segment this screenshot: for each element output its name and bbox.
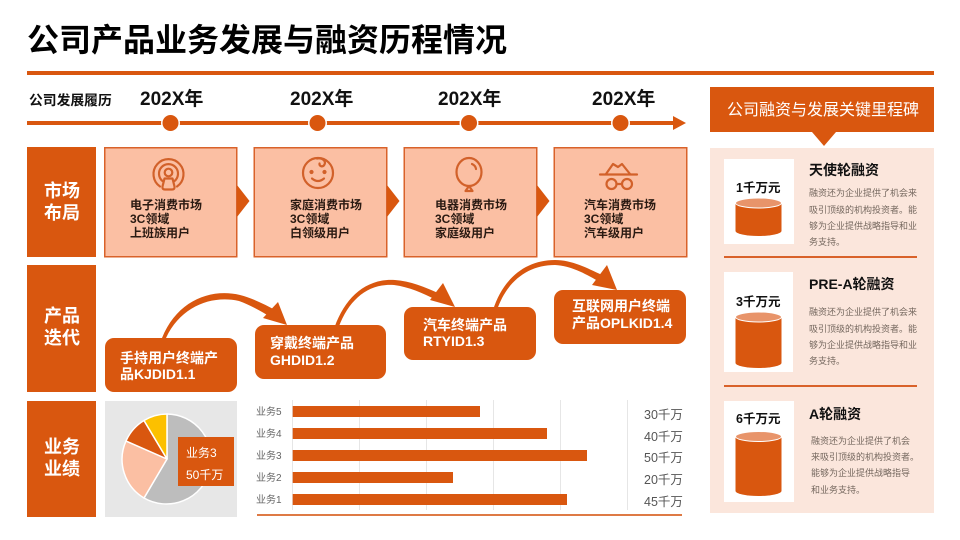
icon: cylinder medium bbox=[736, 312, 782, 368]
milestone: angel round bbox=[724, 159, 917, 258]
milestone: A round: 能够为企业提供战略指导 bbox=[811, 467, 910, 478]
bar chart: 业务1 bbox=[256, 493, 282, 506]
card: electronics market bbox=[105, 148, 237, 257]
row heading: performance: 业务 bbox=[44, 437, 80, 457]
row heading: market: 布局 bbox=[44, 203, 80, 223]
milestone: pre-A round: 3千万元 bbox=[736, 295, 781, 309]
timeline bbox=[27, 87, 686, 132]
arrow: product 2 to 3 bbox=[333, 280, 455, 332]
product box 1: 手持用户终端产 bbox=[120, 350, 218, 366]
milestone: angel round: 天使轮融资 bbox=[809, 162, 879, 178]
row heading: product: 产品 bbox=[44, 306, 80, 326]
timeline node 1: 202X年 bbox=[140, 87, 203, 110]
icon: podcast person bbox=[154, 159, 184, 190]
milestone: pre-A round bbox=[724, 272, 917, 387]
row heading: product: 迭代 bbox=[44, 328, 80, 348]
product box 1 bbox=[105, 338, 237, 392]
timeline node 4: 202X年 bbox=[592, 87, 655, 110]
arrow: card 3 to 4 bbox=[537, 185, 550, 217]
bar chart: 业务5 bbox=[256, 405, 282, 418]
bar chart: 20千万 bbox=[644, 473, 683, 487]
milestone: pre-A round: 够为企业提供战略指导和业 bbox=[809, 339, 917, 350]
milestone: angel round: 融资还为企业提供了机会来 bbox=[809, 187, 917, 198]
milestone: pre-A round: 吸引顶级的机构投资者。能 bbox=[809, 323, 917, 334]
timeline node 1 bbox=[140, 87, 203, 132]
milestone header bbox=[710, 87, 934, 146]
milestone background bbox=[710, 148, 934, 513]
arrow: product 1 to 2 bbox=[162, 293, 287, 338]
milestone: pre-A round: 融资还为企业提供了机会来 bbox=[809, 306, 917, 317]
card: appliance market: 电器消费市场 bbox=[435, 197, 507, 212]
product box 2: GHDID1.2 bbox=[270, 352, 335, 368]
timeline node 2 bbox=[290, 87, 353, 132]
card: home market: 3C领域 bbox=[290, 211, 329, 226]
card: auto market: 汽车消费市场 bbox=[584, 197, 656, 212]
row heading: product bbox=[27, 265, 96, 392]
bar chart bbox=[256, 400, 683, 516]
milestone: pre-A round: 务支持。 bbox=[809, 355, 845, 366]
card: electronics market: 上班族用户 bbox=[130, 225, 190, 240]
icon: cylinder large bbox=[736, 432, 782, 496]
card: home market: 白领级用户 bbox=[290, 225, 350, 240]
product box 4: 产品OPLKID1.4 bbox=[572, 315, 673, 331]
timeline node 3: 202X年 bbox=[438, 87, 501, 110]
milestone: A round: A轮融资 bbox=[809, 406, 861, 422]
milestone: A round bbox=[724, 401, 919, 502]
milestone: angel round: 1千万元 bbox=[736, 181, 781, 195]
row heading: market bbox=[27, 147, 96, 257]
row heading: performance bbox=[27, 401, 96, 517]
milestone: A round: 和业务支持。 bbox=[811, 484, 865, 495]
timeline axis arrow bbox=[27, 116, 686, 130]
arrow: card 1 to 2 bbox=[237, 185, 250, 217]
pie callout: 业务3 bbox=[186, 445, 217, 460]
milestone: A round: 来吸引顶级的机构投资者。 bbox=[811, 451, 919, 462]
bar chart: 业务3 bbox=[256, 449, 282, 462]
product box 3: 汽车终端产品 bbox=[423, 317, 507, 333]
timeline node 4 bbox=[592, 87, 655, 132]
bar chart: 业务4 bbox=[256, 427, 282, 440]
row heading: market: 市场 bbox=[44, 180, 80, 201]
milestone header: 公司融资与发展关键里程碑 bbox=[727, 101, 919, 119]
product box 3: RTYID1.3 bbox=[423, 333, 485, 349]
panel: product iteration bbox=[27, 260, 686, 392]
product box 4 bbox=[554, 290, 686, 344]
icon: cylinder small bbox=[736, 198, 782, 236]
timeline node 2: 202X年 bbox=[290, 87, 353, 110]
product box 2: 穿戴终端产品 bbox=[270, 335, 354, 351]
milestone: pre-A round: PRE-A轮融资 bbox=[809, 276, 895, 292]
milestone: A round: 融资还为企业提供了机会 bbox=[811, 435, 910, 446]
milestone: angel round: 吸引顶级的机构投资者。能 bbox=[809, 204, 917, 215]
card: electronics market: 3C领域 bbox=[130, 211, 169, 226]
bar chart: 40千万 bbox=[644, 430, 683, 444]
card: electronics market: 电子消费市场 bbox=[130, 197, 202, 212]
card: auto market: 汽车级用户 bbox=[584, 225, 644, 240]
arrow: card 2 to 3 bbox=[387, 185, 400, 217]
card: auto market: 3C领域 bbox=[584, 211, 623, 226]
bar chart: 30千万 bbox=[644, 408, 683, 422]
timeline node 3 bbox=[438, 87, 501, 132]
bar chart: 45千万 bbox=[644, 495, 683, 509]
pie callout: 50千万 bbox=[186, 468, 223, 482]
bar chart: 业务2 bbox=[256, 471, 282, 484]
card: appliance market: 家庭级用户 bbox=[435, 225, 495, 240]
panel: market layout bbox=[27, 147, 687, 257]
card: auto market bbox=[554, 148, 687, 257]
milestone: A round: 6千万元 bbox=[736, 412, 781, 426]
card: appliance market bbox=[404, 148, 537, 257]
pie callout bbox=[178, 437, 234, 486]
milestone: angel round: 够为企业提供战略指导和业 bbox=[809, 220, 917, 231]
row heading: performance: 业绩 bbox=[44, 458, 80, 479]
card: appliance market: 3C领域 bbox=[435, 211, 474, 226]
pie chart bbox=[105, 401, 237, 517]
product box 4: 互联网用户终端 bbox=[572, 298, 670, 314]
title: 公司产品业务发展与融资历程情况 bbox=[27, 22, 507, 58]
product box 1: 品KJDID1.1 bbox=[120, 366, 196, 382]
icon: baby face bbox=[303, 158, 333, 188]
icon: balloon bbox=[456, 158, 482, 191]
bar chart: 50千万 bbox=[644, 451, 683, 465]
arrow: product 3 to 4 bbox=[493, 260, 617, 310]
product box 3 bbox=[404, 307, 536, 360]
timeline label: 公司发展履历 bbox=[29, 92, 112, 108]
panel: financing milestones bbox=[710, 87, 934, 513]
card: home market bbox=[254, 148, 387, 257]
icon: hat and glasses bbox=[600, 164, 637, 189]
panel: business performance bbox=[27, 400, 683, 517]
product box 2 bbox=[255, 325, 386, 379]
card: home market: 家庭消费市场 bbox=[290, 197, 362, 212]
milestone: angel round: 务支持。 bbox=[809, 236, 845, 247]
